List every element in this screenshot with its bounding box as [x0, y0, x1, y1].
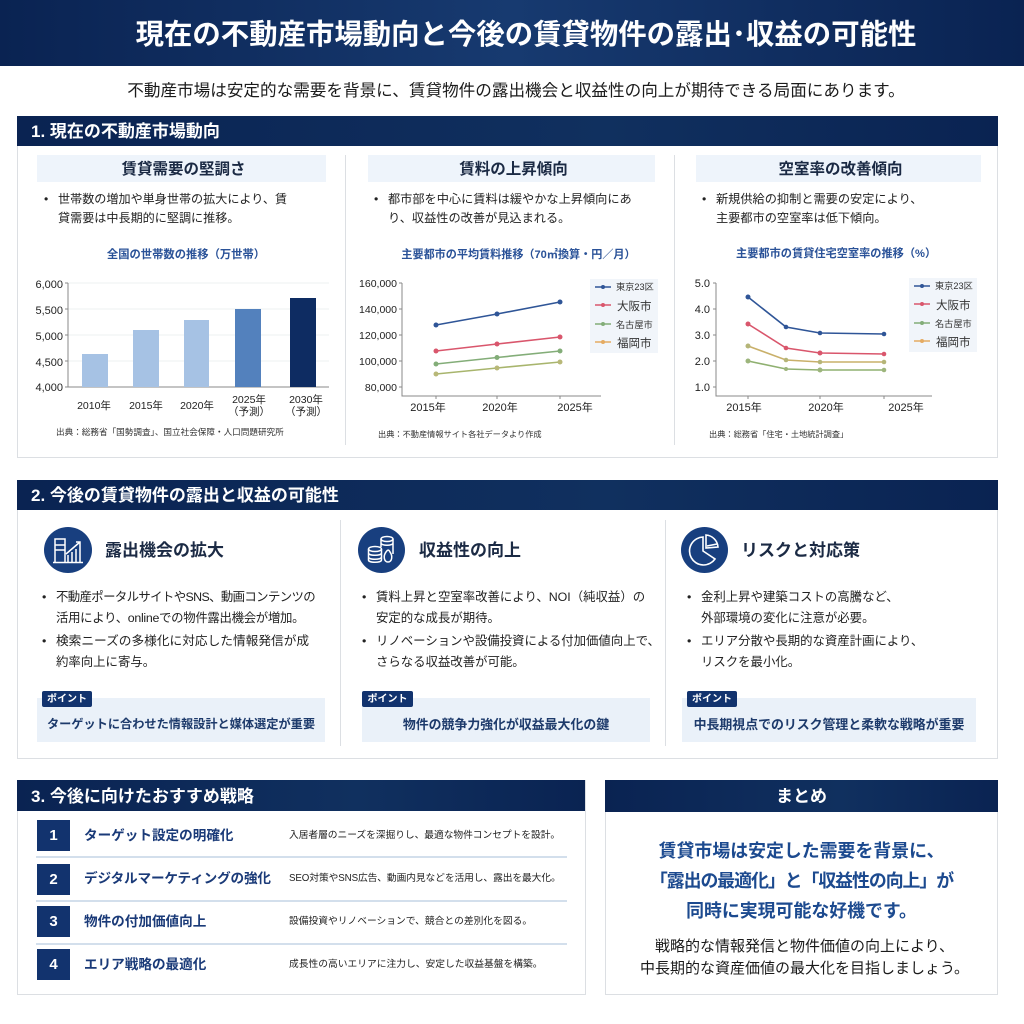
text: risk: リスクを最小化。 [701, 655, 800, 669]
text: revenue: • [362, 590, 366, 604]
number 2: 2 [49, 871, 58, 888]
text: rent [374, 192, 632, 225]
step 4 [37, 949, 542, 980]
line chart: vacancy: 2020年 [808, 400, 844, 414]
panel: exposure and revenue [17, 480, 998, 759]
section 3 heading [17, 780, 585, 811]
text: risk: • [687, 590, 691, 604]
number 3 [37, 906, 70, 937]
step 3 [37, 906, 532, 937]
summary key message: 賃貸市場は安定した需要を背景に、 [659, 841, 944, 861]
number 1 [37, 820, 70, 851]
point tag: risk [687, 691, 737, 707]
step 1 [37, 820, 560, 851]
column heading: rent: 賃料の上昇傾向 [459, 161, 568, 178]
text: risk: 金利上昇や建築コストの高騰など、 [701, 590, 899, 604]
section 3 heading: 3. 今後に向けたおすすめ戦略 [31, 787, 254, 806]
bar chart: households: 6,000 [35, 279, 63, 291]
exposure and revenue content [17, 480, 998, 742]
icon: coins [358, 527, 405, 573]
bar chart: households: 4,500 [35, 357, 63, 369]
text: demand [44, 192, 287, 225]
line chart: vacancy: 名古屋市 [935, 318, 972, 329]
text: vacancy: 新規供給の抑制と需要の安定により、 [716, 192, 922, 206]
point box: revenue [362, 698, 650, 742]
text: exposure: • [42, 634, 46, 648]
summary closing text [640, 938, 969, 977]
title banner [0, 0, 1024, 66]
text: revenue: リノベーションや設備投資による付加価値向上で、 [376, 634, 660, 648]
column heading: demand: 賃貸需要の堅調さ [121, 161, 246, 178]
column heading: demand [37, 155, 326, 182]
heading: exposure: 露出機会の拡大 [105, 541, 224, 560]
summary key message: 「露出の最適化」と「収益性の向上」が [650, 871, 953, 891]
title 1: ターゲット設定の明確化 [84, 828, 234, 843]
section 1 heading [17, 116, 998, 146]
text: risk: 外部環境の変化に注意が必要。 [701, 611, 874, 625]
number 1: 1 [49, 827, 58, 844]
bar chart: households: 2015年 [129, 399, 163, 412]
description 4: 成長性の高いエリアに注力し、安定した収益基盤を構築。 [289, 959, 542, 970]
bar chart: households: 4,000 [35, 382, 63, 394]
line chart: rent: 160,000 [359, 278, 397, 290]
text: rent: • [374, 192, 378, 206]
text: rent: 都市部を中心に賃料は緩やかな上昇傾向にあ [388, 192, 632, 206]
bar chart: households [35, 279, 329, 418]
text: exposure: 約率向上に寄与。 [56, 655, 155, 669]
section 2 heading: 2. 今後の賃貸物件の露出と収益の可能性 [31, 486, 339, 505]
text: revenue [362, 590, 660, 669]
line chart: vacancy [695, 278, 977, 414]
line chart: vacancy: 3.0 [695, 330, 710, 342]
panel: market trends [17, 116, 998, 458]
summary closing text: 中長期的な資産価値の最大化を目指しましょう。 [640, 960, 969, 977]
text: vacancy: 主要都市の空室率は低下傾向。 [716, 211, 887, 225]
text: exposure: 検索ニーズの多様化に対応した情報発信が成 [56, 634, 309, 648]
line chart: vacancy: 東京23区 [935, 280, 973, 291]
panel: strategies [17, 780, 586, 995]
line chart: vacancy: 5.0 [695, 278, 710, 290]
line chart: rent: 2020年 [482, 400, 518, 414]
text: revenue: さらなる収益改善が可能。 [376, 655, 525, 669]
market trends content [17, 116, 998, 439]
section 1 heading: 1. 現在の不動産市場動向 [31, 122, 220, 141]
heading: revenue: 収益性の向上 [419, 541, 521, 560]
chart title: households: 全国の世帯数の推移（万世帯） [107, 249, 265, 261]
line chart: vacancy: 大阪市 [936, 298, 970, 312]
bar chart: households: 5,500 [35, 305, 63, 317]
text: vacancy: • [702, 192, 706, 206]
text: vacancy [702, 192, 922, 225]
source: vacancy: 出典：総務省「住宅・土地統計調査」 [709, 430, 848, 439]
point tag: revenue: ポイント [368, 694, 408, 705]
line chart: vacancy: 4.0 [695, 304, 710, 316]
description 3: 設備投資やリノベーションで、競合との差別化を図る。 [289, 916, 532, 927]
bar chart: households: 2030年 [289, 393, 323, 406]
section 2 heading [17, 480, 998, 510]
bar chart: households: 2020年 [180, 399, 214, 412]
title 4: エリア戦略の最適化 [84, 957, 206, 972]
bar chart: households: （予測） [228, 405, 270, 418]
text: risk: エリア分散や長期的な資産計画により、 [701, 634, 923, 648]
text: revenue: 賃料上昇と空室率改善により、NOI（純収益）の [376, 590, 645, 604]
bar chart: households: （予測） [285, 405, 327, 418]
line chart: rent: 2025年 [557, 400, 593, 414]
summary heading: まとめ [776, 787, 827, 806]
line chart: rent: 120,000 [359, 330, 397, 342]
title 2: デジタルマーケティングの強化 [84, 871, 271, 886]
column heading: vacancy: 空室率の改善傾向 [778, 161, 902, 178]
summary closing text: 戦略的な情報発信と物件価値の向上により、 [655, 938, 954, 955]
line chart: rent: 2015年 [410, 400, 446, 414]
summary key message: 同時に実現可能な好機です。 [686, 901, 917, 921]
text: exposure: 活用により、onlineでの物件露出機会が増加。 [56, 611, 304, 625]
source: rent: 出典：不動産情報サイト各社データより作成 [378, 430, 542, 439]
text: risk [687, 590, 923, 669]
bar chart: households: 2010年 [77, 399, 111, 412]
text: exposure [42, 590, 315, 669]
description 2: SEO対策やSNS広告、動画内見などを活用し、露出を最大化。 [289, 873, 561, 884]
subtitle: 不動産市場は安定的な需要を背景に、賃貸物件の露出機会と収益性の向上が期待できる局面にあります。 [127, 81, 905, 100]
point box: risk: 中長期視点でのリスク管理と柔軟な戦略が重要 [694, 717, 964, 732]
icon: pie chart [681, 527, 728, 573]
chart title: rent: 主要都市の平均賃料推移（70㎡換算・円／月） [401, 249, 636, 261]
line chart: rent: 140,000 [359, 304, 397, 316]
text: demand: 世帯数の増加や単身世帯の拡大により、賃 [58, 192, 287, 206]
column heading: vacancy [696, 155, 981, 182]
point tag: revenue [362, 691, 413, 707]
line chart: vacancy: 福岡市 [936, 335, 970, 349]
text: exposure: 不動産ポータルサイトやSNS、動画コンテンツの [56, 590, 315, 604]
point tag: exposure: ポイント [47, 694, 87, 705]
line chart: rent: 名古屋市 [616, 319, 653, 330]
title 3: 物件の付加価値向上 [84, 914, 206, 929]
line chart: rent: 東京23区 [616, 281, 654, 292]
text: demand: • [44, 192, 48, 206]
text: exposure: • [42, 590, 46, 604]
column heading: rent [368, 155, 655, 182]
point box: risk [682, 698, 976, 742]
summary key message [650, 841, 954, 921]
bar chart: households: 5,000 [35, 331, 63, 343]
panel: summary [605, 780, 998, 995]
summary content [605, 780, 998, 977]
line chart: vacancy: 2025年 [888, 400, 924, 414]
point box: exposure: ターゲットに合わせた情報設計と媒体選定が重要 [47, 717, 315, 731]
source: households: 出典：総務省「国勢調査」、国立社会保障・人口問題研究所 [56, 427, 284, 437]
text: rent: り、収益性の改善が見込まれる。 [388, 211, 570, 225]
line chart: rent: 大阪市 [617, 299, 652, 313]
line chart: vacancy: 2015年 [726, 400, 762, 414]
text: revenue: 安定的な成長が期待。 [376, 611, 500, 625]
number 3: 3 [49, 913, 58, 930]
description 1: 入居者層のニーズを深掘りし、最適な物件コンセプトを設計。 [289, 830, 560, 841]
strategies content [17, 780, 585, 980]
point tag: exposure [42, 691, 92, 707]
number 4: 4 [49, 956, 58, 973]
line chart: rent: 80,000 [365, 382, 397, 394]
line chart: rent: 100,000 [359, 356, 397, 368]
text: revenue: • [362, 634, 366, 648]
number 2 [37, 864, 70, 895]
number 4 [37, 949, 70, 980]
chart title: vacancy: 主要都市の賃貸住宅空室率の推移（%） [736, 248, 936, 260]
text: risk: • [687, 634, 691, 648]
step 2 [37, 864, 561, 895]
line chart: rent [359, 278, 658, 414]
line chart: rent: 福岡市 [617, 336, 652, 350]
line chart: vacancy: 2.0 [695, 356, 710, 368]
text: demand: 貸需要は中長期的に堅調に推移。 [58, 211, 239, 225]
point box: exposure [37, 698, 325, 742]
title banner: 現在の不動産市場動向と今後の賃貸物件の露出･収益の可能性 [136, 19, 916, 51]
heading: risk: リスクと対応策 [741, 541, 860, 560]
point box: revenue: 物件の競争力強化が収益最大化の鍵 [403, 717, 609, 732]
bar chart: households: 2025年 [232, 393, 266, 406]
icon: buildings and growth [44, 527, 92, 573]
summary heading [605, 780, 998, 812]
point tag: risk: ポイント [692, 694, 732, 705]
line chart: vacancy: 1.0 [695, 382, 710, 394]
